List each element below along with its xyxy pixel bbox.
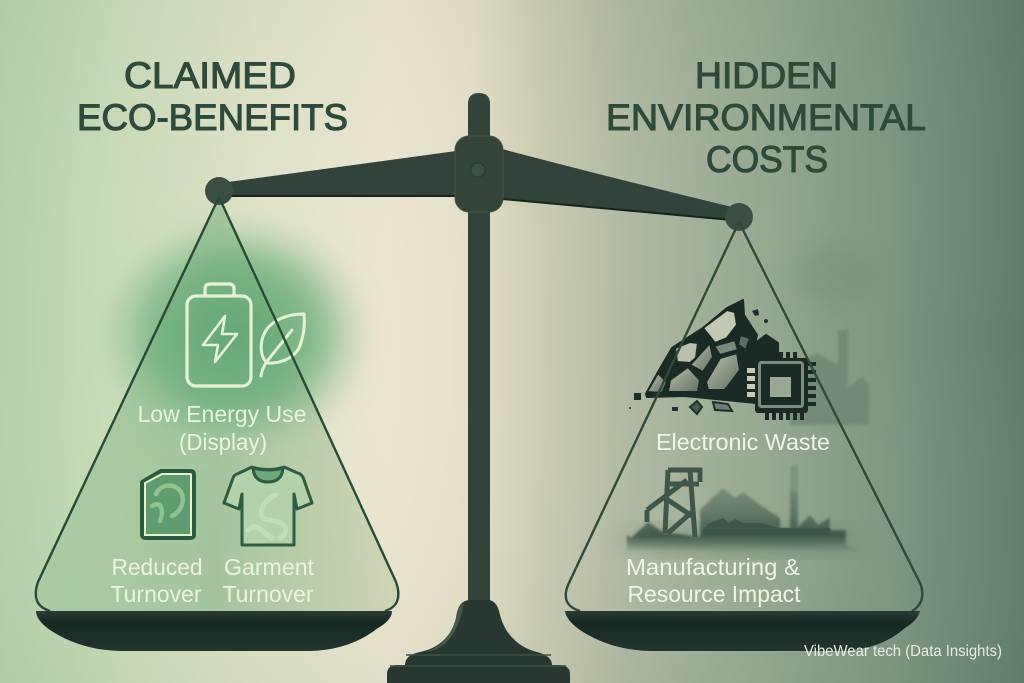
panel: right background factory haze <box>790 245 875 425</box>
right pan <box>565 611 920 651</box>
text: source credit: VibeWear tech (Data Insights) <box>804 643 1002 660</box>
right beam <box>502 149 732 221</box>
right pivot <box>725 203 753 231</box>
icon: garment t-shirt <box>224 467 312 545</box>
text: garment turnover <box>222 554 315 607</box>
text: electronic waste: Electronic Waste <box>656 429 830 455</box>
text: manufacturing and resource impact: Resource Impact <box>628 581 801 607</box>
text: reduced turnover: Reduced <box>112 554 202 580</box>
icon: leaf <box>261 314 304 376</box>
pivot pin <box>471 163 485 177</box>
text: low energy use: Low Energy Use <box>138 401 306 427</box>
left strings <box>36 197 398 611</box>
chart: balance scale <box>36 93 922 683</box>
heading: claimed eco-benefits <box>77 55 348 138</box>
icon: distant factory silhouette <box>790 330 869 425</box>
panel: left green glow and basket fill <box>36 195 399 611</box>
pivot block <box>455 136 503 212</box>
icon: rock debris <box>629 309 768 414</box>
text: low energy use: (Display) <box>179 429 267 455</box>
text: low energy use <box>138 401 306 455</box>
icon: manufacturing and mining silhouette <box>615 466 865 552</box>
icon: low energy battery <box>187 284 251 386</box>
post <box>468 200 490 605</box>
icon: electronic waste rock pile <box>646 300 778 403</box>
icon: computer chip <box>747 352 816 420</box>
text: manufacturing and resource impact <box>626 554 801 607</box>
left beam <box>228 151 456 197</box>
text: reduced turnover: Turnover <box>110 581 202 607</box>
right strings <box>566 222 922 611</box>
heading: claimed eco-benefits: CLAIMED <box>124 55 296 96</box>
text: reduced turnover <box>110 554 202 607</box>
heading: hidden environmental costs <box>606 55 926 180</box>
text: manufacturing and resource impact: Manufacturing & <box>626 554 800 580</box>
heading: hidden environmental costs: HIDDEN <box>695 55 838 96</box>
text: garment turnover: Garment <box>224 554 315 580</box>
top finial <box>468 93 490 140</box>
base <box>387 600 570 683</box>
heading: hidden environmental costs: ENVIRONMENTAL <box>606 97 926 138</box>
left pan <box>36 611 392 651</box>
heading: claimed eco-benefits: ECO-BENEFITS <box>77 97 348 138</box>
icon: reduced turnover card <box>142 471 194 538</box>
left pivot <box>205 177 233 205</box>
heading: hidden environmental costs: COSTS <box>706 139 828 180</box>
text: garment turnover: Turnover <box>222 581 314 607</box>
